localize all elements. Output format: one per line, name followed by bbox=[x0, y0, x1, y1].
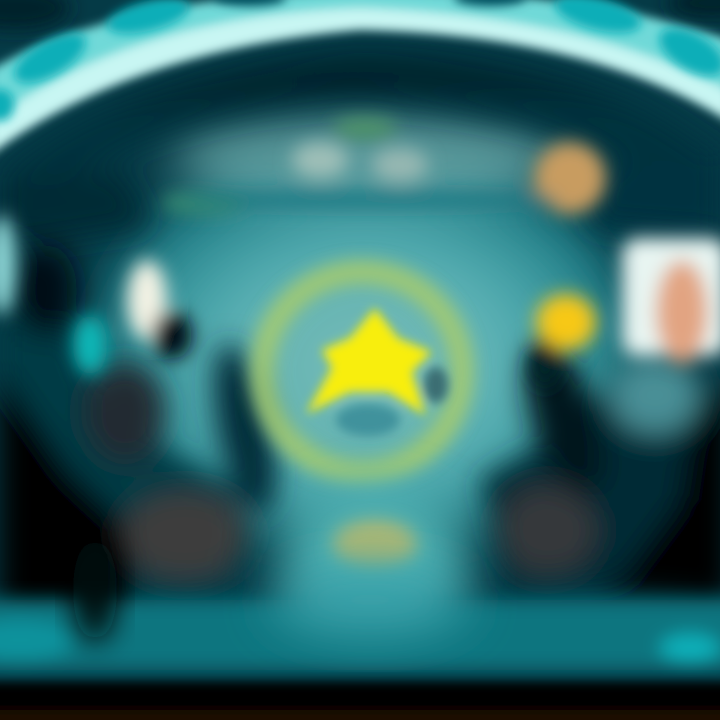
left figure highlights bbox=[0, 215, 192, 375]
illuminated arch band bbox=[0, 0, 720, 155]
left foreground leg bbox=[73, 538, 117, 642]
central ring bbox=[262, 272, 462, 472]
dark ceiling arch bbox=[0, 45, 720, 250]
top corners bbox=[0, 0, 720, 30]
right figure bbox=[480, 336, 720, 600]
bottom black strip bbox=[0, 682, 720, 720]
lower reflection emblem bbox=[333, 521, 417, 569]
left figure bbox=[0, 230, 289, 620]
floor center glow bbox=[270, 564, 470, 636]
central yellow emblem bbox=[306, 308, 448, 436]
lower glow bbox=[285, 490, 465, 630]
central hall glow bbox=[95, 117, 635, 545]
orange emblem bbox=[534, 142, 606, 214]
right figure highlights bbox=[529, 238, 720, 389]
floor band bbox=[0, 600, 720, 670]
upper wall details bbox=[161, 118, 606, 214]
arch panels bbox=[0, 0, 720, 121]
